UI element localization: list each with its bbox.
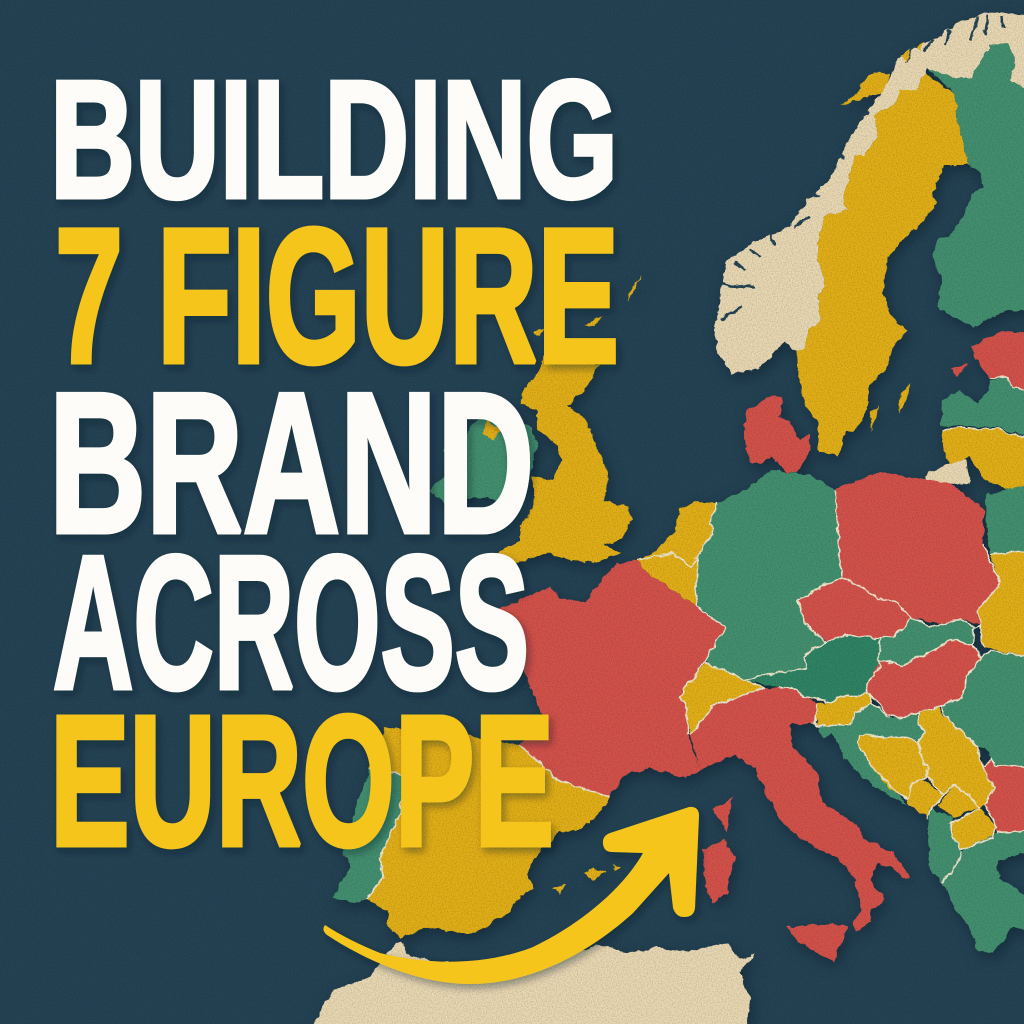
- headline: [49, 47, 619, 885]
- Bosnia: [858, 735, 927, 800]
- Slovenia: [815, 693, 872, 727]
- Belgium: [637, 553, 697, 605]
- Portugal: [333, 770, 405, 903]
- North Africa: [300, 940, 755, 1024]
- France: [495, 560, 725, 797]
- Great Britain: [487, 347, 632, 563]
- Germany: [695, 470, 843, 680]
- headline line: ACROSS: ACROSS: [53, 517, 529, 729]
- Spain: [368, 728, 610, 938]
- Norway: [715, 13, 1024, 373]
- Kosovo: [937, 785, 980, 818]
- Lithuania: [942, 427, 1024, 492]
- Slovakia: [878, 618, 975, 667]
- headline line: 7 FIGURE: 7 FIGURE: [55, 188, 619, 403]
- country borders: [368, 377, 1024, 898]
- Estonia: [970, 332, 1024, 388]
- Croatia: [818, 703, 925, 805]
- headline line: BRAND: BRAND: [49, 352, 534, 575]
- Czechia: [798, 578, 912, 642]
- Latvia: [940, 377, 1024, 440]
- Kaliningrad: [925, 460, 972, 485]
- Gotland and Oland: [870, 383, 912, 432]
- Italy: [690, 687, 910, 932]
- map of Europe: [300, 13, 1024, 1024]
- Greece: [943, 830, 1024, 953]
- Ireland: [430, 415, 537, 505]
- Denmark: [743, 395, 810, 473]
- Albania: [928, 808, 962, 882]
- North Macedonia: [950, 808, 997, 848]
- arrow: [323, 807, 699, 984]
- Ukraine: [978, 548, 1024, 660]
- Sicily: [785, 925, 848, 962]
- Serbia: [918, 708, 993, 808]
- Poland: [835, 472, 1000, 625]
- Corsica: [713, 797, 733, 832]
- Romania: [940, 650, 1024, 767]
- Norwegian fjords: [720, 15, 1003, 320]
- Sweden: [797, 73, 967, 455]
- Sardinia: [703, 840, 735, 903]
- headline line: BUILDING: BUILDING: [50, 47, 618, 233]
- Northern Ireland: [483, 420, 500, 440]
- Hungary: [868, 640, 982, 718]
- Bulgaria: [983, 758, 1024, 833]
- Austria: [745, 635, 880, 702]
- Belarus: [985, 480, 1024, 555]
- Finland: [928, 43, 1024, 327]
- Montenegro: [907, 778, 943, 818]
- Saaremaa: [950, 363, 967, 377]
- Switzerland: [680, 662, 765, 735]
- headline line: EUROPE: EUROPE: [50, 678, 554, 885]
- Balearic islands: [553, 865, 620, 893]
- Shetland and Orkney: [533, 275, 642, 337]
- Netherlands: [637, 502, 717, 567]
- Lofoten islands: [840, 43, 924, 106]
